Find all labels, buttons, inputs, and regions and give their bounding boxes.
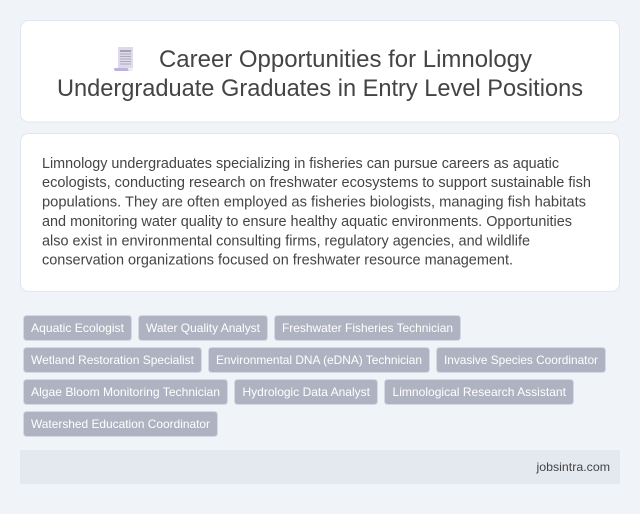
tag: Wetland Restoration Specialist xyxy=(24,348,202,372)
tag: Invasive Species Coordinator: Invasive Species Coordinator xyxy=(444,353,598,367)
tag: Watershed Education Coordinator xyxy=(24,412,218,436)
tag: Hydrologic Data Analyst xyxy=(234,380,378,404)
panel: title card xyxy=(20,20,620,122)
panel: description: and monitoring water quality to ensure healthy aquatic environments. Opportunities xyxy=(42,214,572,230)
heading xyxy=(57,46,583,102)
panel: description: populations. They are often employed as fisheries biologists, managing fish habitats xyxy=(42,194,586,210)
tag list xyxy=(24,316,606,436)
panel: description: Limnology undergraduates specializing in fisheries can pursue careers as aquatic xyxy=(42,156,559,172)
panel: description xyxy=(20,134,620,292)
tag: Freshwater Fisheries Technician: Freshwater Fisheries Technician xyxy=(282,321,453,335)
panel: description: conservation organizations focused on freshwater resource management. xyxy=(42,252,513,268)
tag: Algae Bloom Monitoring Technician xyxy=(24,380,228,404)
heading: Undergraduate Graduates in Entry Level Positions xyxy=(57,75,583,102)
tag: Wetland Restoration Specialist: Wetland Restoration Specialist xyxy=(31,353,195,367)
icon: paper scroll xyxy=(114,47,133,71)
footer: jobsintra.com xyxy=(535,460,610,474)
tag: Limnological Research Assistant xyxy=(384,380,574,404)
tag: Watershed Education Coordinator: Watershed Education Coordinator xyxy=(31,417,210,431)
tag: Aquatic Ecologist: Aquatic Ecologist xyxy=(31,321,125,335)
panel: description: also exist in environmental consulting firms, regulatory agencies, and wildlife xyxy=(42,234,530,250)
heading: Career Opportunities for Limnology xyxy=(159,46,532,73)
tag: Hydrologic Data Analyst: Hydrologic Data Analyst xyxy=(242,385,371,399)
tag: Freshwater Fisheries Technician xyxy=(274,316,460,340)
tag: Environmental DNA Technician: Environmental DNA (eDNA) Technician xyxy=(216,353,422,367)
tag: Invasive Species Coordinator xyxy=(436,348,606,372)
tag: Water Quality Analyst: Water Quality Analyst xyxy=(146,321,261,335)
tag: Algae Bloom Monitoring Technician: Algae Bloom Monitoring Technician xyxy=(31,385,220,399)
tag: Environmental DNA Technician xyxy=(208,348,430,372)
tag: Water Quality Analyst xyxy=(138,316,268,340)
tag: Limnological Research Assistant: Limnological Research Assistant xyxy=(392,385,567,399)
panel: description: ecologists, conducting research on freshwater ecosystems to support sustainable fish xyxy=(42,175,591,191)
tag: Aquatic Ecologist xyxy=(24,316,132,340)
footer xyxy=(20,450,620,484)
